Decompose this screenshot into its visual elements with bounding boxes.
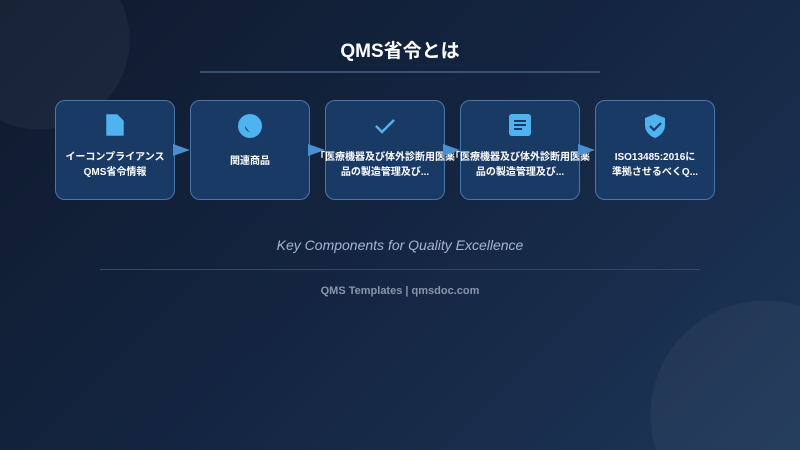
panel: step 1: イーコンプライアンス QMS省令情報 <box>65 152 165 178</box>
icon: check <box>375 119 395 134</box>
icon: globe <box>238 114 262 138</box>
panel: step 4 <box>460 100 580 200</box>
panel: step 3 <box>325 100 445 200</box>
icon: document <box>106 114 124 136</box>
panel: step 4: 「医療機器及び体外診断用医薬 品の製造管理及び... <box>450 152 590 178</box>
icon: list <box>509 114 531 136</box>
panel: step 5 <box>595 100 715 200</box>
footer: QMS Templates | qmsdoc.com <box>321 285 479 297</box>
icon: shield <box>645 114 665 138</box>
arrow 4 <box>578 144 595 156</box>
title: QMS省令とは <box>340 41 460 62</box>
panel: step 5: ISO13485:2016に 準拠させるべくQ... <box>612 152 698 178</box>
arrow 3 <box>443 144 460 156</box>
arrow 1 <box>173 144 190 156</box>
panel: step 1 <box>55 100 175 200</box>
subtitle: Key Components for Quality Excellence <box>277 237 523 253</box>
panel: step 3: 「医療機器及び体外診断用医薬 品の製造管理及び... <box>315 152 455 178</box>
arrow 2 <box>308 144 325 156</box>
panel: step 2: 関連商品 <box>230 156 270 166</box>
panel: step 2 <box>190 100 310 200</box>
